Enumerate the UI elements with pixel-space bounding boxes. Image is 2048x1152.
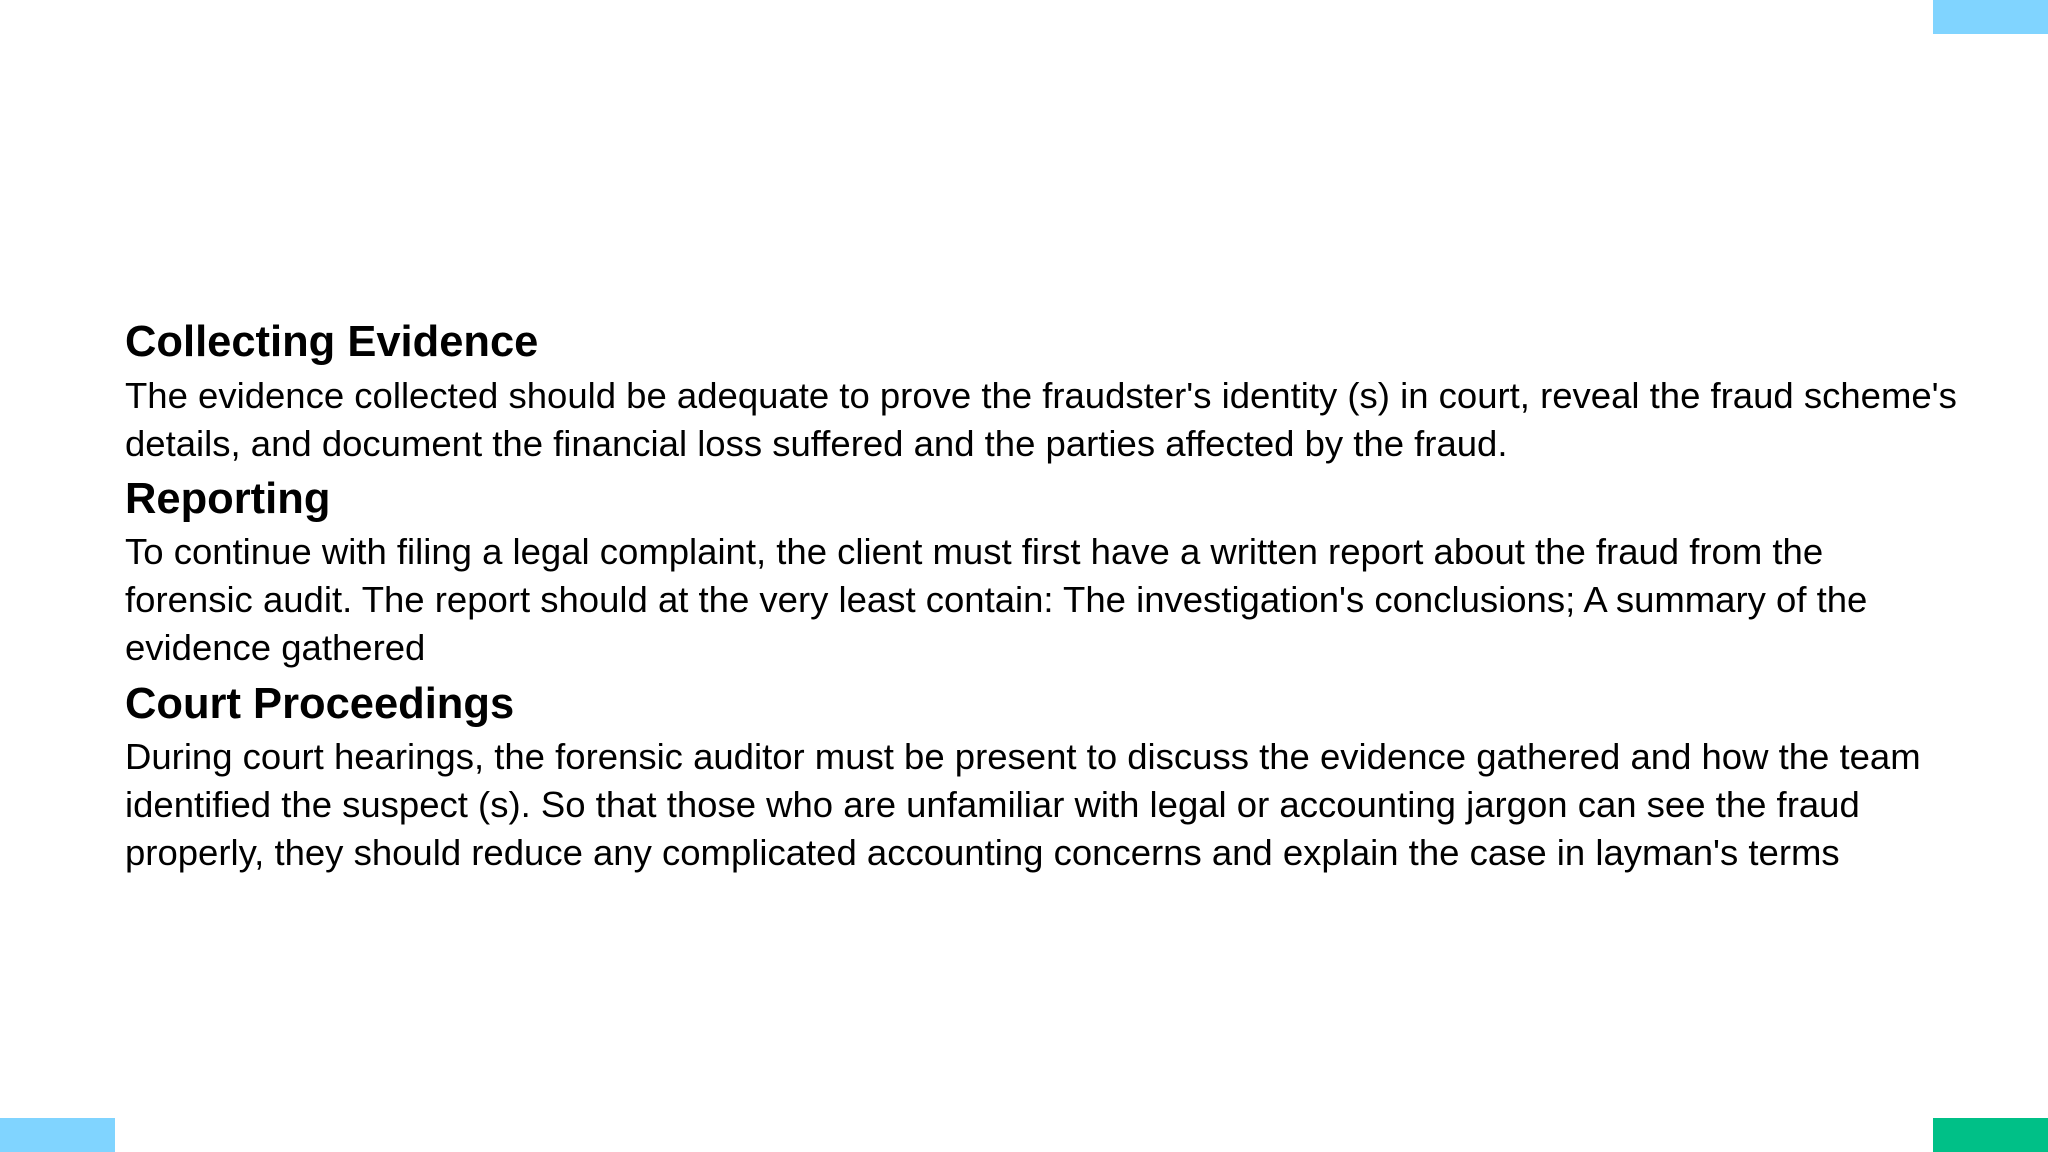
section: reporting [125,475,1867,668]
text block: reporting body: forensic audit. The report should at the very least contain: The investigation's conclusions; A summary of the [125,579,1867,620]
heading: Collecting Evidence: Collecting Evidence [125,318,538,366]
text block: collecting evidence body [125,375,1957,464]
text block: reporting body [125,531,1867,668]
decorative corner: bottom left light blue bar [0,1118,115,1152]
text block: court proceedings body [125,736,1921,873]
section: collecting evidence [125,318,1957,464]
text block: reporting body: evidence gathered [125,627,425,668]
heading: Reporting: Reporting [125,475,330,523]
text block: collecting evidence body: details, and document the financial loss suffered and the parties affected by the fraud. [125,423,1508,464]
text block: reporting body: To continue with filing a legal complaint, the client must first have a written report about the fraud from the [125,531,1823,572]
text block: court proceedings body: During court hearings, the forensic auditor must be present to discuss the evidence gathered and how the team [125,736,1921,777]
decorative corner: top right light blue bar [1933,0,2048,34]
text block: court proceedings body: properly, they should reduce any complicated accounting concerns and explain the case in layman's terms [125,832,1840,873]
section: court proceedings [125,680,1921,873]
text block: collecting evidence body: The evidence collected should be adequate to prove the fraudster's identity (s) in court, reveal the fraud scheme's [125,375,1957,416]
decorative corner: bottom right green bar [1933,1118,2048,1152]
text block: court proceedings body: identified the suspect (s). So that those who are unfamiliar with legal or accounting jargon can see the fraud [125,784,1860,825]
heading: Court Proceedings: Court Proceedings [125,680,514,728]
